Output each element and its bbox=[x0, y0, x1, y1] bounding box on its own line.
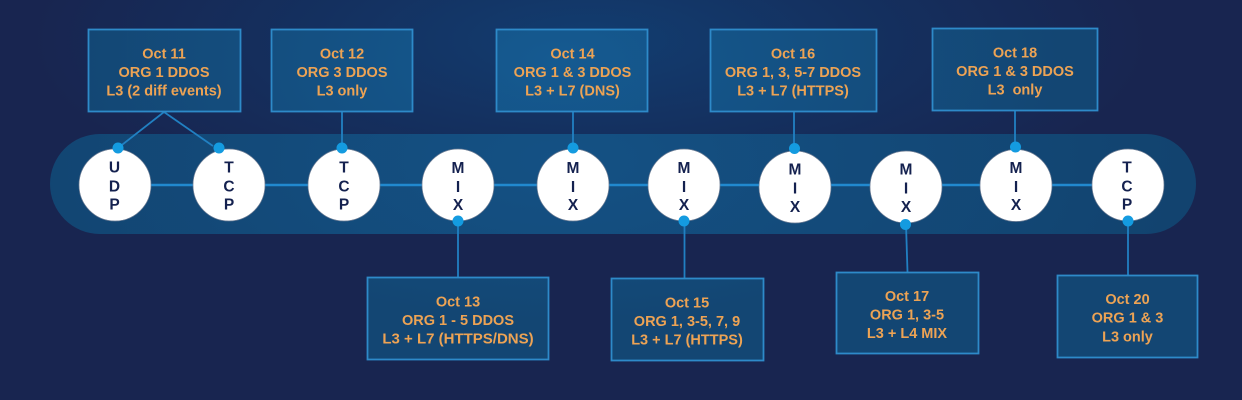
event: Oct 13: X bbox=[453, 197, 464, 214]
event: Oct 15: M bbox=[678, 160, 690, 177]
event: Oct 16: I bbox=[793, 180, 797, 198]
event: Oct 18: M bbox=[1010, 160, 1022, 177]
event: Oct 17: L3 + L4 MIX bbox=[867, 326, 947, 342]
event: Oct 13: I bbox=[456, 179, 460, 196]
event: Oct 17 bbox=[836, 151, 978, 354]
event: Oct 15: I bbox=[682, 179, 686, 196]
event: Oct 18: X bbox=[1011, 197, 1022, 214]
event: Oct 20: T bbox=[1122, 160, 1132, 176]
event: Oct 15 bbox=[612, 149, 764, 360]
event: Oct 12: C bbox=[338, 178, 350, 196]
event: Oct 17: X bbox=[901, 199, 912, 216]
event: Oct 12: L3 only bbox=[317, 84, 367, 100]
event: Oct 17: ORG 1, 3-5 bbox=[870, 308, 944, 324]
event: Oct 11: T bbox=[224, 160, 234, 176]
event: Oct 14: I bbox=[571, 179, 575, 196]
event: Oct 17: Oct 17 bbox=[885, 289, 929, 305]
event: Oct 11: P bbox=[109, 196, 120, 214]
event: Oct 14: ORG 1 & 3 DDOS bbox=[514, 65, 632, 81]
event: Oct 16: M bbox=[789, 162, 801, 178]
event: Oct 17: M bbox=[900, 162, 912, 178]
event: Oct 13: L3 + L7 (HTTPS/DNS) bbox=[382, 330, 534, 348]
event: Oct 16: X bbox=[790, 199, 801, 216]
event: Oct 15: L3 + L7 (HTTPS) bbox=[631, 332, 743, 348]
event: Oct 20: L3 only bbox=[1102, 330, 1153, 346]
event: Oct 11: U bbox=[109, 160, 120, 176]
event: Oct 14 bbox=[496, 30, 648, 221]
event: Oct 13: Oct 13 bbox=[436, 294, 480, 310]
timeline band bbox=[50, 134, 1196, 234]
event: Oct 13: ORG 1 - 5 DDOS bbox=[402, 313, 514, 329]
timeline connector bbox=[115, 184, 1128, 186]
event: Oct 11: Oct 11 bbox=[142, 46, 186, 62]
event: Oct 20: C bbox=[1121, 178, 1133, 196]
event: Oct 18 bbox=[932, 28, 1098, 222]
event: Oct 18: Oct 18 bbox=[993, 46, 1037, 62]
event: Oct 16 bbox=[710, 30, 876, 223]
event: Oct 11: L3 (2 diff events) bbox=[106, 84, 222, 100]
event: Oct 18: I bbox=[1014, 179, 1018, 196]
event: Oct 12: T bbox=[339, 160, 349, 176]
event: Oct 15: Oct 15 bbox=[665, 296, 709, 312]
event: Oct 14: X bbox=[568, 197, 579, 214]
event: Oct 13 bbox=[368, 149, 548, 360]
event: Oct 15: X bbox=[679, 197, 690, 214]
event: Oct 17: I bbox=[904, 180, 908, 198]
event: Oct 14: M bbox=[567, 160, 579, 177]
event: Oct 20: ORG 1 & 3 bbox=[1092, 310, 1163, 326]
event: Oct 18: ORG 1 & 3 DDOS bbox=[956, 64, 1074, 80]
event: Oct 12 bbox=[272, 30, 412, 221]
event: Oct 11: P bbox=[224, 196, 234, 214]
event: Oct 11: D bbox=[109, 178, 120, 196]
event: Oct 15: ORG 1, 3-5, 7, 9 bbox=[634, 314, 740, 330]
event: Oct 14: Oct 14 bbox=[550, 46, 595, 62]
event: Oct 20 bbox=[1058, 149, 1198, 358]
event: Oct 16: ORG 1, 3, 5-7 DDOS bbox=[725, 65, 861, 81]
event: Oct 20: Oct 20 bbox=[1105, 292, 1150, 308]
event: Oct 11: ORG 1 DDOS bbox=[118, 65, 210, 81]
event: Oct 20: P bbox=[1122, 196, 1132, 214]
event: Oct 16: L3 + L7 (HTTPS) bbox=[737, 84, 849, 100]
event: Oct 14: L3 + L7 (DNS) bbox=[525, 84, 620, 100]
event: Oct 11 bbox=[79, 30, 265, 221]
event: Oct 13: M bbox=[452, 160, 464, 177]
event: Oct 16: Oct 16 bbox=[771, 46, 815, 62]
event: Oct 12: P bbox=[339, 196, 349, 214]
event: Oct 11: C bbox=[223, 178, 235, 196]
event: Oct 18: L3 only bbox=[988, 82, 1042, 98]
event: Oct 12: ORG 3 DDOS bbox=[296, 65, 388, 81]
event: Oct 12: Oct 12 bbox=[320, 46, 364, 62]
